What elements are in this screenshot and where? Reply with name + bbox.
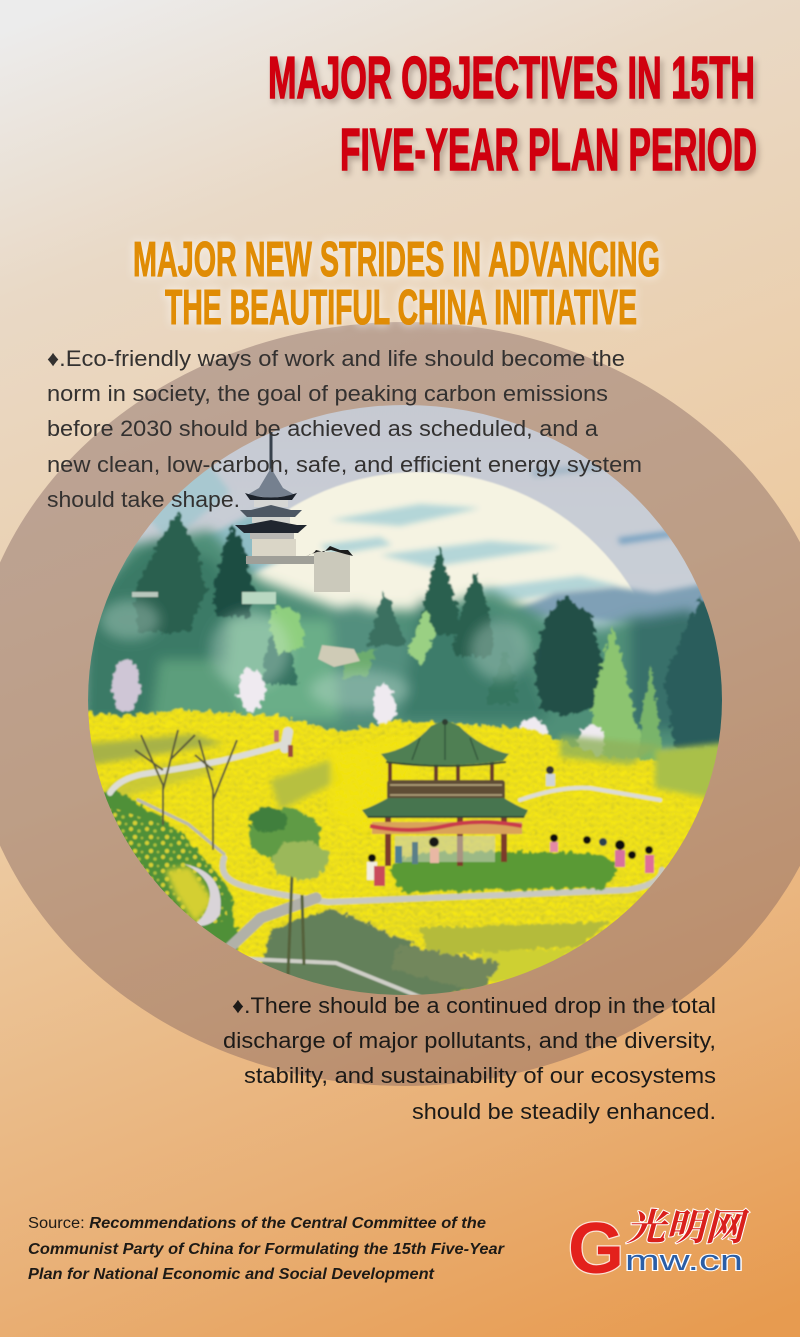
- illustration: landscape with pavilion: [88, 405, 722, 995]
- leafy foreground tree: [248, 808, 328, 975]
- small hillside hut: [318, 645, 360, 667]
- pale moon disc: [252, 472, 632, 616]
- logo: gmw.cn: G: [568, 1209, 624, 1289]
- conifers and dark trees: [134, 512, 730, 747]
- subheading: [133, 233, 660, 335]
- logo: gmw.cn: [568, 1197, 750, 1289]
- text block: energy and carbon goal: should take shape.: [47, 487, 240, 512]
- text block: energy and carbon goal: new clean, low-carbon, safe, and efficient energy system: [47, 452, 642, 477]
- title: [268, 45, 757, 183]
- text block: energy and carbon goal: ♦.Eco-friendly ways of work and life should become the: [47, 346, 625, 371]
- text block: energy and carbon goal: norm in society, the goal of peaking carbon emissions: [47, 381, 608, 406]
- source note: [28, 1215, 505, 1283]
- winding paths: [110, 732, 662, 997]
- source note: Plan for National Economic and Social Development: [28, 1266, 435, 1283]
- logo: gmw.cn: mw.cn: [625, 1245, 743, 1277]
- source note: Source: Recommendations of the Central Committee of the: [28, 1215, 486, 1232]
- pavilion: [362, 719, 617, 892]
- blossoms: [112, 659, 605, 766]
- text block: energy and carbon goal: [47, 346, 642, 512]
- visitors: [274, 730, 654, 886]
- crescent: [184, 864, 221, 926]
- mist over the forest: [100, 600, 530, 710]
- pagoda: [235, 432, 353, 592]
- text block: pollutants and ecosystems: [223, 993, 716, 1124]
- text block: pollutants and ecosystems: should be steadily enhanced.: [412, 1099, 716, 1124]
- bare trees: [135, 730, 237, 850]
- text block: pollutants and ecosystems: discharge of major pollutants, and the diversity,: [223, 1028, 716, 1053]
- text block: pollutants and ecosystems: stability, and sustainability of our ecosystems: [244, 1063, 716, 1088]
- lower fields: [260, 896, 610, 995]
- source note: Communist Party of China for Formulating the 15th Five-Year: [28, 1241, 505, 1258]
- text block: pollutants and ecosystems: ♦.There should be a continued drop in the total: [232, 993, 716, 1018]
- decorative outer ring: [0, 322, 800, 1086]
- lower left hedge: [104, 790, 241, 950]
- text block: energy and carbon goal: before 2030 should be achieved as scheduled, and a: [47, 416, 599, 441]
- forest mass: [80, 530, 760, 755]
- logo: gmw.cn: 光明网: [626, 1197, 750, 1251]
- rapeseed fields: [80, 710, 730, 1002]
